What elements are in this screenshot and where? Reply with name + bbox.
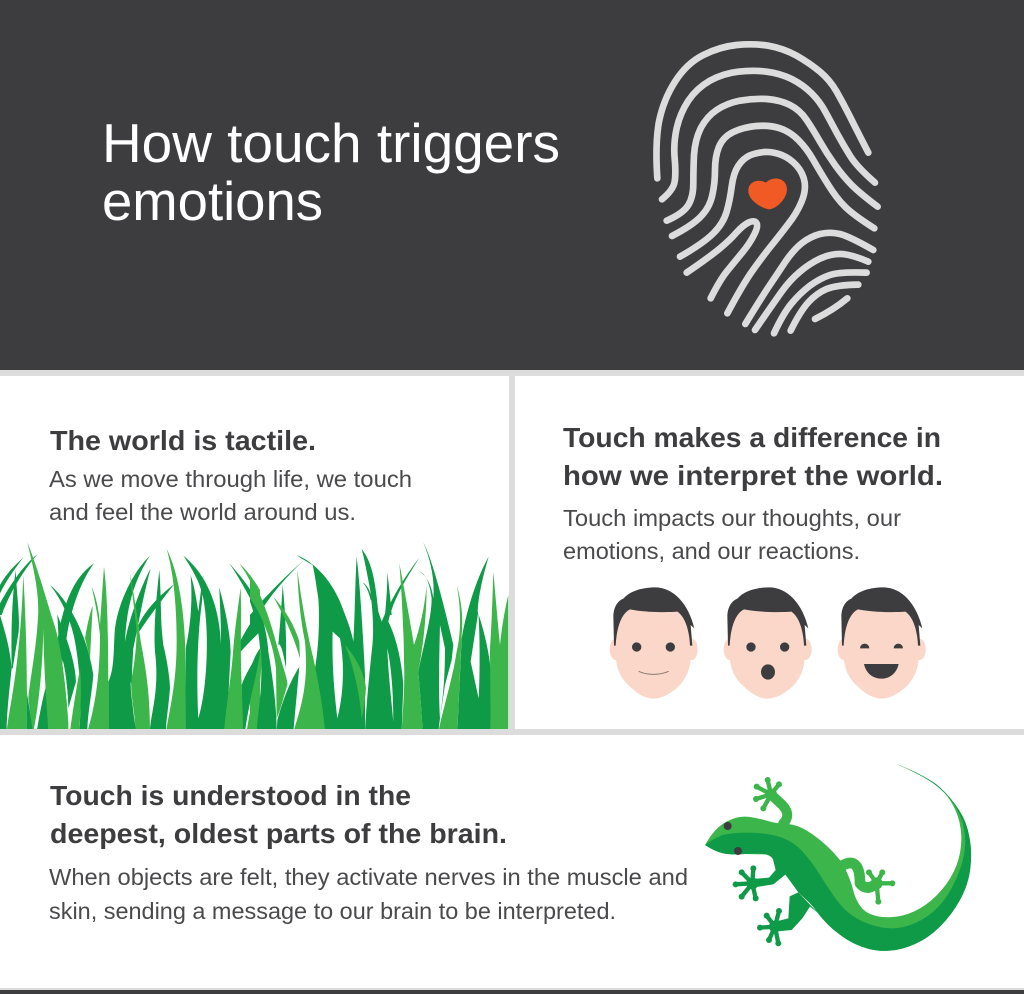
heading: touch makes a difference (563, 422, 943, 491)
title: emotions (102, 170, 323, 232)
gecko body: dark lower (705, 763, 971, 951)
panel: oldest parts of the brain (0, 735, 1024, 988)
text block: nerves description: When objects are felt, they activate nerves in the muscle and (49, 864, 688, 890)
icon: smiling face (610, 587, 698, 699)
text block: nerves description: skin, sending a message to our brain to be interpreted. (49, 898, 616, 924)
gecko eyes (724, 822, 742, 855)
text block: tactile description (49, 466, 412, 525)
heading: touch is understood: Touch is understood in the (50, 780, 411, 811)
text block: touch impacts: emotions, and our reactions. (563, 538, 860, 564)
panel: touch makes a difference (515, 376, 1024, 729)
text block: tactile description: and feel the world around us. (49, 499, 356, 525)
gecko body: light upper (705, 763, 971, 951)
heading: touch makes a difference: how we interpret the world. (563, 460, 943, 491)
text block: tactile description: As we move through life, we touch (49, 466, 412, 492)
title: How touch triggers (102, 112, 560, 174)
heading: touch is understood: deepest, oldest parts of the brain. (50, 818, 507, 849)
heading: touch makes a difference: Touch makes a difference in (563, 422, 941, 453)
text block: touch impacts (563, 505, 901, 564)
heading: the world is tactile: The world is tactile. (50, 425, 316, 456)
icon: laughing face (838, 587, 926, 699)
heading: touch is understood (50, 780, 507, 849)
icon: surprised face (724, 587, 812, 699)
illustration: grass (0, 542, 508, 732)
icon: heart (748, 178, 787, 209)
panel: the world is tactile (0, 376, 509, 732)
text block: touch impacts: Touch impacts our thoughts, our (563, 505, 901, 531)
icon: gecko (705, 763, 971, 951)
title (102, 112, 560, 232)
panel: header (0, 0, 1024, 370)
icon: fingerprint with heart (656, 44, 878, 333)
text block: nerves description (49, 864, 688, 924)
